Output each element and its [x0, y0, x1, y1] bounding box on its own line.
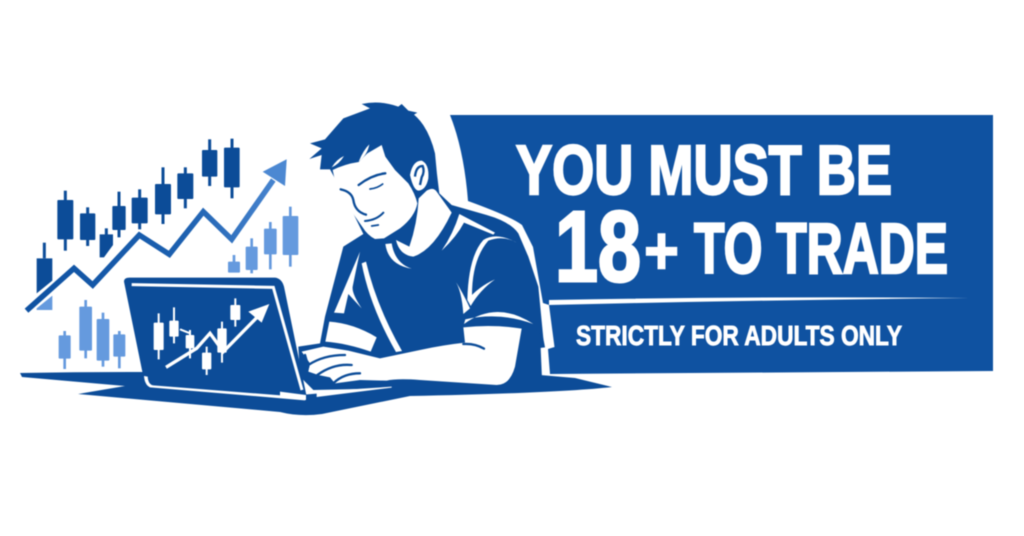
candlestick chart [37, 139, 298, 369]
banner panel [450, 115, 993, 374]
face details [341, 173, 385, 226]
arrow: rising trend line [26, 159, 287, 311]
shirt notch [536, 329, 545, 348]
heading: you must be: YOU MUST BE [516, 131, 892, 209]
divider line [549, 297, 969, 305]
person body silhouette [298, 102, 543, 390]
neck [396, 189, 452, 257]
heading: plus sign: + [644, 213, 679, 289]
hair highlights [332, 144, 369, 167]
forearm and hand [302, 326, 522, 385]
finger lines [305, 344, 484, 383]
laptop screen [124, 278, 307, 407]
heading: 18: 18 [555, 191, 641, 303]
shirt line details [334, 214, 533, 352]
laptop [124, 278, 307, 407]
laptop base stripe [317, 387, 392, 397]
person at laptop [280, 102, 545, 400]
subheading: strictly for adults only: STRICTLY FOR ADULTS ONLY [576, 320, 902, 351]
laptop screen chart [154, 298, 269, 375]
upper arm [325, 322, 377, 352]
table surface [20, 372, 612, 415]
ear [410, 161, 428, 191]
face [333, 145, 417, 239]
